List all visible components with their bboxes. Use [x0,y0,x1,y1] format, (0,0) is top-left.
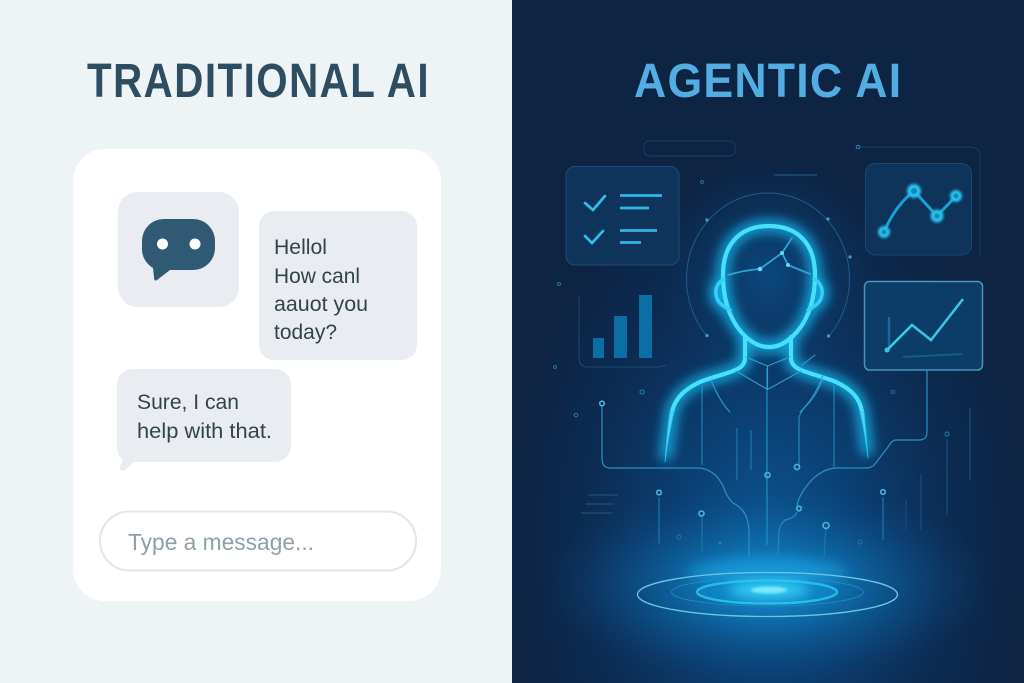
heading: agentic AI: AGENTIC AI [634,54,902,107]
collar lines [711,355,823,412]
chat window card [73,149,441,601]
neural lines in head [728,238,810,275]
panel: checklist [566,166,679,265]
chat bubble: greeting: aauot you [274,293,368,316]
chat bubble: greeting: today? [274,321,337,344]
heading: traditional AI: TRADITIONAL AI [87,55,430,108]
shoulders outline [672,337,862,412]
panel: agentic AI [512,0,1024,683]
chat bubble: greeting: How canl [274,265,360,288]
message input [100,512,416,570]
icon: chat bubble with eyes [142,219,215,281]
chat bubble: greeting: Hellol [274,236,327,259]
chatbot avatar tile [118,192,239,307]
circuit traces and nodes [602,368,970,558]
chat bubble: greeting [259,211,417,360]
glowing platform [638,558,898,616]
panel: trend chart [864,282,982,370]
checklist lines [620,196,662,242]
bar chart [579,295,666,367]
lower shoulder tapers [665,412,674,462]
panel: line chart with nodes [866,164,972,255]
icon: check marks [585,196,605,243]
faint background details [554,141,980,513]
chat bubble: reply: Sure, I can [137,391,239,414]
head outline [716,226,822,347]
chat bubble: reply: help with that. [137,420,272,443]
halo ring [686,193,852,338]
message input: Type a message... [128,529,314,555]
figure: glowing agent head and body [665,226,868,462]
chat bubble: reply [117,369,291,471]
panel: traditional AI [0,0,512,683]
head glow [666,226,867,455]
